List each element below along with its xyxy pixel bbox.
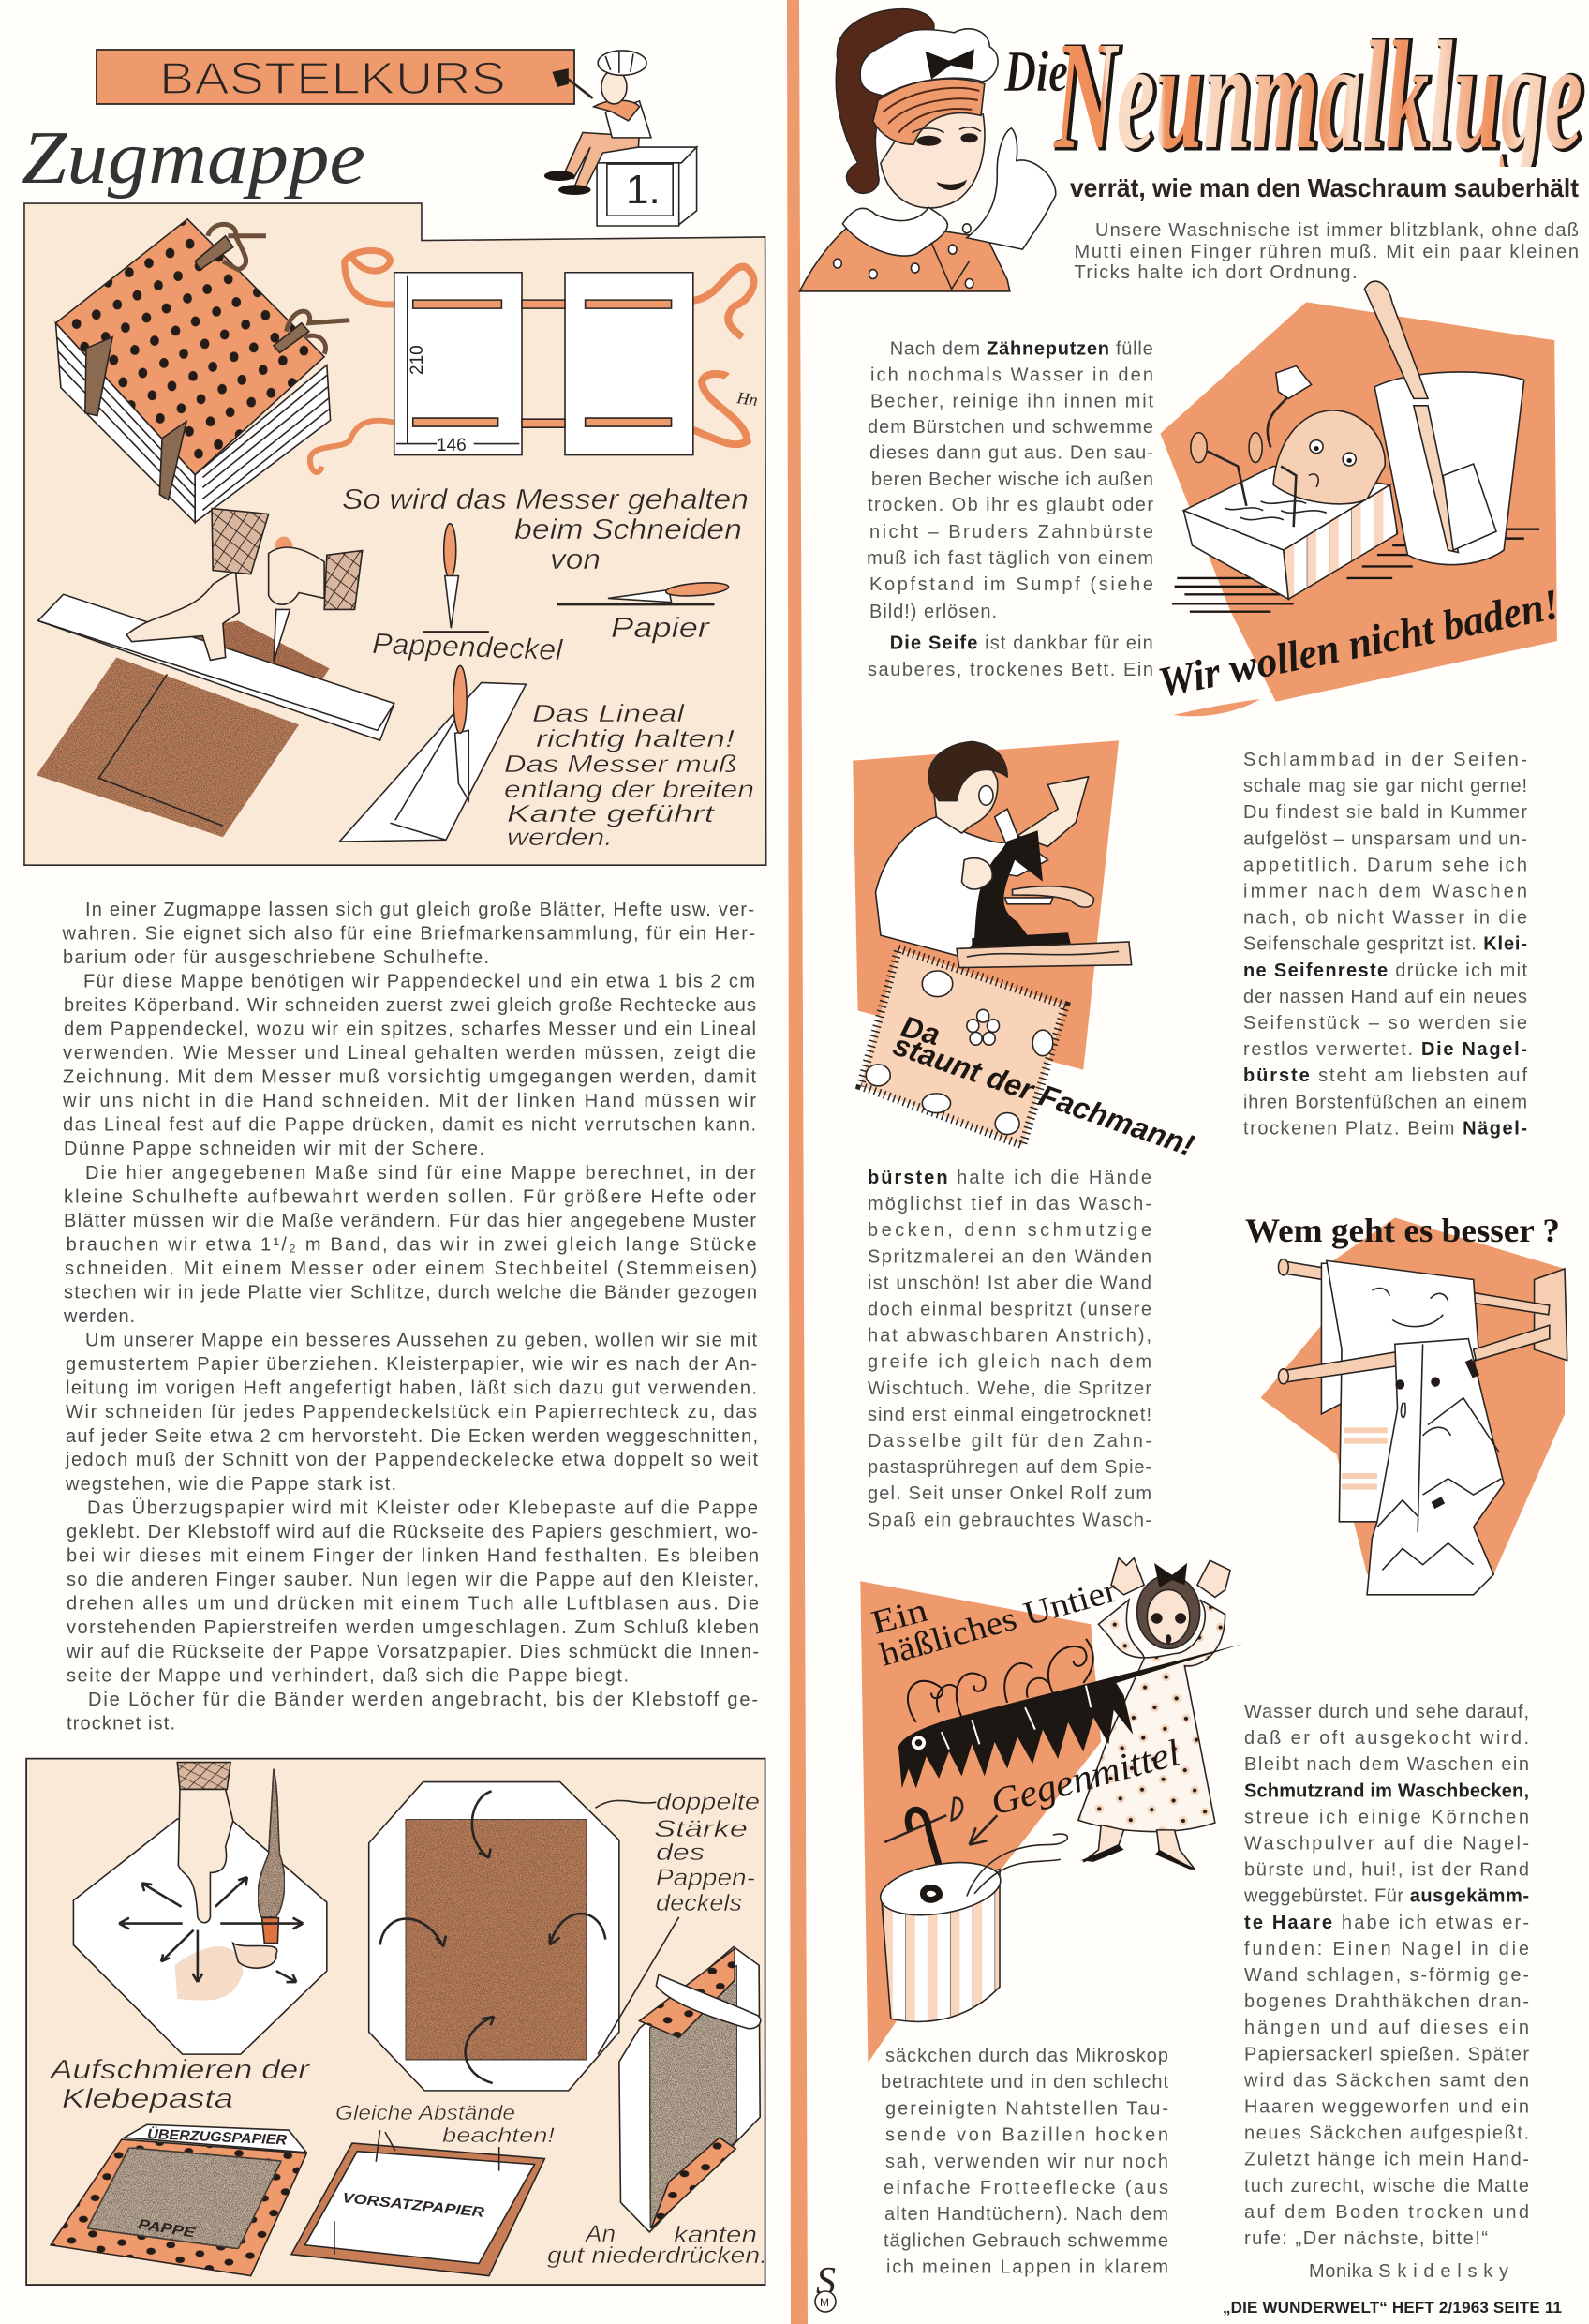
- caption: ruler tip: werden.: [507, 823, 613, 851]
- text block: column 1 middle: Spaß ein gebrauchtes Wasch-: [868, 1510, 1151, 1530]
- text block: column 2 bottom: [1243, 1702, 1529, 2249]
- illustration: pressing the edges: [595, 1800, 761, 2232]
- text block: column 1 bottom: sende von Bazillen hocken: [885, 2125, 1168, 2146]
- text block: column 1 bottom: täglichen Gebrauch schwemme: [884, 2230, 1168, 2251]
- text block: column 2 top: Seifenstück – so werden sie: [1243, 1013, 1527, 1034]
- text block: column 2 top: appetitlich. Darum sehe ich: [1243, 855, 1527, 875]
- text block: column 1 middle: pastasprühregen auf dem Spie-: [868, 1457, 1151, 1478]
- text block: Zugmappe article: trocknet ist.: [67, 1713, 175, 1734]
- text block: column 2 bottom: daß er oft ausgekocht wird.: [1244, 1728, 1529, 1749]
- text block: column 1 top: sauberes, trockenes Bett. Ein: [868, 660, 1153, 680]
- text block: Zugmappe article: Für diese Mappe benötigen wir Pappendeckel und ein etwa 1 bis 2 cm: [83, 971, 755, 991]
- caption: equal distances: [335, 2101, 555, 2147]
- text block: column 1 top: Becher, reinige ihn innen mit: [870, 391, 1153, 411]
- text block: column 1 middle: Wischtuch. Wehe, die Spritzer: [868, 1378, 1151, 1399]
- caption: ruler tip: Kante geführt: [507, 799, 716, 827]
- text block: column 1 bottom: einfache Frotteeflecke (aus: [884, 2178, 1168, 2198]
- text block: column 2 top: Schlammbad in der Seifen-: [1243, 750, 1527, 770]
- intro text: [1074, 220, 1579, 283]
- text block: column 2 top: [1243, 750, 1527, 1139]
- text block: Zugmappe article: Blätter müssen wir die Maße verändern. Für das hier angegebene Muster: [64, 1211, 756, 1231]
- text block: column 2 bottom: Schmutzrand im Waschbecken,: [1244, 1780, 1529, 1801]
- illustration: knife positions: [423, 524, 729, 632]
- caption: knife grip: Pappendeckel: [372, 627, 564, 666]
- banner title: BASTELKURS: [159, 54, 506, 104]
- text block: column 2 bottom: Papiersackerl spießen. Später: [1244, 2044, 1529, 2064]
- caption: double thickness: des: [656, 1840, 705, 1866]
- text block: Zugmappe article: werden.: [63, 1306, 135, 1327]
- text block: column 2 bottom: tuch zurecht, wische die Matte: [1244, 2176, 1529, 2197]
- text block: Zugmappe article: Dünne Pappe schneiden wir mit der Schere.: [64, 1139, 484, 1159]
- text block: column 2 bottom: Haaren weggeworfen und ein: [1244, 2097, 1529, 2118]
- caption: press edges: gut niederdrücken.: [547, 2242, 767, 2269]
- labels on paper: ÜBERZUGSPAPIER: [147, 2126, 288, 2149]
- illustration: cover paper on cardboard: [51, 2124, 306, 2276]
- text block: column 1 top: dieses dann gut aus. Den sau-: [869, 443, 1153, 464]
- text block: column 2 top: Seifenschale gespritzt ist. Klei-: [1243, 934, 1527, 955]
- panel: Zugmappe instructions: [24, 203, 766, 865]
- text block: Zugmappe article: breites Köperband. Wir schneiden zuerst zwei gleich große Rechtecke aus: [64, 995, 756, 1016]
- caption: Ein hässliches Untier: Ein: [868, 1591, 931, 1642]
- icon: boy sitting on numbered box: [544, 51, 697, 226]
- text block: Zugmappe article: Zeichnung. Mit dem Messer muß vorsichtig umgegangen werden, damit: [63, 1067, 756, 1088]
- caption: applying paste: Aufschmieren der: [49, 2055, 311, 2085]
- text block: column 2 bottom: auf dem Boden trocken und: [1244, 2202, 1529, 2223]
- text block: column 2 top: der nassen Hand auf ein neues: [1243, 987, 1527, 1007]
- caption: double thickness: [654, 1789, 760, 1916]
- text block: Zugmappe article: verwenden. Wie Messer und Lineal gehalten werden müssen, zeigt die: [63, 1043, 756, 1064]
- text block: column 1 middle: bürsten halte ich die Hände: [868, 1168, 1151, 1188]
- text block: column 2 top: ne Seifenreste drücke ich mit: [1243, 961, 1527, 981]
- text block: Zugmappe article: drehen alles um und drücken mit einem Tuch alle Luftblasen aus. Die: [67, 1594, 759, 1615]
- text block: Zugmappe article: barium oder für ausgeschriebene Schulhefte.: [63, 947, 489, 968]
- text block: column 2 top: aufgelöst – unsparsam und un-: [1243, 828, 1527, 849]
- mark: initials Hn: Hn: [735, 388, 759, 410]
- text block: column 1 bottom: betrachtete und in den schlecht: [881, 2072, 1168, 2093]
- labels on paper: PAPPE: [137, 2216, 197, 2242]
- illustration: endpaper frame: [291, 2130, 544, 2276]
- text block: column 2 bottom: Wand schlagen, s-förmig ge-: [1244, 1965, 1529, 1986]
- text block: column 1 middle: ist unschön! Ist aber die Wand: [868, 1273, 1151, 1293]
- text block: column 1 top: muß ich fast täglich von einem: [867, 548, 1153, 569]
- text block: Zugmappe article: In einer Zugmappe lassen sich gut gleich große Blätter, Hefte usw. ver-: [85, 900, 754, 920]
- illustration: soap in dish and glass: [1160, 281, 1557, 702]
- intro text: Unsere Waschnische ist immer blitzblank, ohne daß: [1095, 220, 1579, 241]
- text block: Zugmappe article: vorstehenden Papierstreifen werden umgeschlagen. Zum Schluß kleben: [67, 1617, 759, 1638]
- text block: column 1 top: Die Seife ist dankbar für ein: [890, 633, 1153, 654]
- caption: knife grip: beim Schneiden: [514, 513, 742, 545]
- box number: 1.: [626, 167, 661, 213]
- text block: column 1 top: Kopfstand im Sumpf (siehe: [869, 574, 1153, 595]
- text block: Zugmappe article: stechen wir in jede Platte vier Schlitze, durch welche die Bänder gezogen: [64, 1282, 757, 1303]
- text block: column 2 bottom: wird das Säckchen samt den: [1243, 2070, 1529, 2091]
- caption: Da staunt der Fachmann: Da: [898, 1009, 943, 1051]
- text block: column 1 top: beren Becher wische ich außen: [871, 469, 1153, 490]
- intro text: Tricks halte ich dort Ordnung.: [1074, 262, 1357, 283]
- text block: column 1 middle: doch einmal bespritzt (unsere: [868, 1299, 1151, 1319]
- text block: column 1 bottom: gereinigten Nahtstellen Tau-: [885, 2098, 1168, 2119]
- text block: Zugmappe article: bei wir dieses mit einem Finger der linken Hand festhalten. Es bleiben: [67, 1546, 759, 1567]
- caption: ruler tip: entlang der breiten: [504, 775, 754, 803]
- text block: column 2 bottom: hängen und auf dieses ein: [1244, 2018, 1529, 2038]
- caption: press edges: kanten: [674, 2222, 757, 2248]
- text block: Zugmappe article: leitung im vorigen Heft angefertigt haben, läßt sich dazu gut verwenden.: [66, 1378, 757, 1399]
- text block: column 2 top: restlos verwertet. Die Nagel-: [1243, 1039, 1527, 1060]
- caption: equal distances: Gleiche Abstände: [335, 2101, 515, 2124]
- text block: column 2 bottom: rufe: „Der nächste, bitte!“: [1244, 2228, 1488, 2249]
- caption: double thickness: Pappen-: [656, 1865, 755, 1891]
- text block: column 2 top: nach, ob nicht Wasser in die: [1243, 908, 1527, 929]
- text block: column 1 top: ich nochmals Wasser in den: [870, 365, 1153, 386]
- text block: column 1 top: nicht – Bruders Zahnbürste: [869, 522, 1153, 543]
- title: Die Neunmalkluge: Die: [1003, 40, 1068, 104]
- text block: Zugmappe article: wir uns nicht in die Hand schneiden. Mit der linken Hand müssen wir: [62, 1091, 756, 1111]
- text block: Zugmappe article: [62, 900, 759, 1734]
- text block: Zugmappe article: dem Pappendeckel, wozu wir ein spitzes, scharfes Messer und ein Lineal: [64, 1020, 756, 1040]
- text block: column 1 bottom: ich meinen Lappen in klarem: [886, 2257, 1168, 2278]
- text block: column 2 top: bürste steht am liebsten auf: [1243, 1065, 1527, 1086]
- caption: ruler tip: Das Lineal: [532, 699, 686, 727]
- text block: column 1 middle: möglichst tief in das Wasch-: [868, 1194, 1151, 1214]
- text block: column 2 bottom: weggebürstet. Für ausgekämm-: [1243, 1886, 1529, 1907]
- text block: Zugmappe article: Das Überzugspapier wird mit Kleister oder Klebepaste auf die Pappe: [87, 1497, 758, 1518]
- icon: monogram SM: M: [820, 2296, 829, 2309]
- text block: column 1 middle: gel. Seit unser Onkel Rolf zum: [868, 1483, 1151, 1504]
- text block: column 1 bottom: sah, verwenden wir nur noch: [885, 2152, 1168, 2172]
- text block: Zugmappe article: wahren. Sie eignet sich also für eine Briefmarkensammlung, für ein Her-: [62, 923, 755, 944]
- caption: knife grip: [342, 483, 749, 666]
- text block: column 2 bottom: Wasser durch und sehe darauf,: [1244, 1702, 1529, 1722]
- text block: Zugmappe article: wir auf die Rückseite der Pappe Vorsatzpapier. Dies schmückt die Innen-: [66, 1642, 759, 1662]
- text block: column 2 bottom: streue ich einige Körnchen: [1244, 1807, 1529, 1827]
- illustration: ruler and knife: [339, 665, 526, 842]
- text block: column 1 middle: [868, 1168, 1151, 1530]
- illustration: hand cutting cardboard: [37, 509, 394, 837]
- text block: column 1 bottom: alten Handtüchern). Nach dem: [884, 2204, 1168, 2225]
- text block: column 1 bottom: [881, 2046, 1168, 2278]
- text block: column 1 middle: sind erst einmal eingetrocknet!: [868, 1405, 1151, 1425]
- caption: double thickness: Stärke: [654, 1816, 748, 1842]
- text block: column 1 top: [867, 339, 1153, 680]
- text block: column 2 bottom: funden: Einen Nagel in die: [1244, 1939, 1529, 1959]
- title: Die Neunmalkluge: [1004, 38, 1585, 167]
- labels on paper: [137, 2126, 485, 2242]
- caption: knife grip: Papier: [611, 611, 711, 644]
- labels on paper: VORSATZPAPIER: [342, 2190, 485, 2221]
- panel: gluing instructions: [26, 1759, 767, 2285]
- text block: Zugmappe article: Wir schneiden für jedes Pappendeckelstück ein Papierrechteck zu, das: [66, 1402, 757, 1423]
- illustration: comb monster, girl and pot: [860, 1558, 1243, 2063]
- illustration: towels on rack: [1261, 1217, 1567, 1595]
- illustration: scientist with microscope: [853, 740, 1132, 1070]
- text block: column 2 bottom: bürste und, hui!, ist der Rand: [1244, 1860, 1529, 1881]
- text block: column 2 top: trockenen Platz. Beim Nägel-: [1243, 1118, 1527, 1139]
- text block: column 1 bottom: säckchen durch das Mikroskop: [885, 2046, 1168, 2066]
- text block: column 2 bottom: bogenes Drahthäkchen dran-: [1244, 1991, 1529, 2012]
- caption: ruler tip: [504, 699, 754, 851]
- text block: column 2 bottom: te Haare habe ich etwas er-: [1244, 1913, 1529, 1933]
- author signature: Monika S k i d e l s k y: [1309, 2261, 1508, 2282]
- text block: Zugmappe article: so die anderen Finger sauber. Nun legen wir die Pappe auf den Kleister,: [67, 1570, 759, 1590]
- caption: knife grip: von: [550, 543, 601, 575]
- text block: column 1 middle: Spritzmalerei an den Wänden: [868, 1246, 1151, 1267]
- caption: ruler tip: Das Messer muß: [504, 750, 737, 778]
- text block: Zugmappe article: Die Löcher für die Bänder werden angebracht, bis der Klebstoff ge-: [88, 1690, 758, 1710]
- caption: Da staunt der Fachmann: staunt der Fachmann!: [889, 1028, 1198, 1162]
- caption: press edges: [547, 2221, 767, 2269]
- banner: Bastelkurs: [97, 50, 574, 104]
- text block: column 2 bottom: Zuletzt hänge ich mein Hand-: [1244, 2150, 1529, 2170]
- heading: Zugmappe: Zugmappe: [22, 117, 365, 200]
- text block: column 2 top: immer nach dem Waschen: [1243, 881, 1527, 901]
- illustration: girl with raised finger: [799, 9, 1056, 291]
- text block: Zugmappe article: brauchen wir etwa 1¹/₂ m Band, das wir in zwei gleich lange Stücke: [67, 1234, 757, 1255]
- caption: Wem geht es besser: Wem geht es besser ?: [1245, 1212, 1560, 1249]
- caption: equal distances: beachten!: [442, 2123, 555, 2147]
- text block: column 1 middle: becken, denn schmutzige: [868, 1220, 1151, 1241]
- text block: Zugmappe article: geklebt. Der Klebstoff wird auf die Rückseite des Papiers geschmiert, wo-: [67, 1522, 758, 1542]
- text block: Zugmappe article: gemustertem Papier überziehen. Kleisterpapier, wie wir es nach der An-: [66, 1354, 757, 1375]
- text block: column 1 middle: hat abwaschbaren Anstrich),: [868, 1326, 1151, 1347]
- text block: column 2 top: Du findest sie bald in Kummer: [1243, 802, 1527, 823]
- illustration: finished folder: [55, 219, 349, 523]
- caption: double thickness: doppelte: [656, 1789, 760, 1815]
- text block: column 2 bottom: Waschpulver auf die Nagel-: [1244, 1833, 1529, 1854]
- illustration: fringed cloth: [860, 948, 1065, 1145]
- text block: column 1 middle: greife ich gleich nach dem: [868, 1352, 1151, 1373]
- illustration: pasteboards with ribbons: [310, 251, 753, 472]
- text block: Zugmappe article: das Lineal fest auf die Pappe drücken, damit es nicht verrutschen kann.: [63, 1115, 756, 1136]
- illustration: gluing with finger and brush: [73, 1763, 327, 2054]
- dimension: 210: 210: [408, 345, 427, 375]
- footer: issue and page: „DIE WUNDERWELT“ HEFT 2/1963 SEITE 11: [1223, 2299, 1562, 2317]
- dimension: 146: 146: [437, 436, 467, 455]
- illustration: cardboard on glued paper: [369, 1782, 619, 2091]
- text block: Zugmappe article: Die hier angegebenen Maße sind für eine Mappe berechnet, in der: [85, 1163, 756, 1184]
- text block: column 2 bottom: neues Säckchen aufgespießt.: [1244, 2123, 1529, 2144]
- caption: applying paste: [49, 2055, 311, 2114]
- text block: column 1 top: Bild!) erlösen.: [869, 602, 997, 622]
- text block: Zugmappe article: auf jeder Seite etwa 2 cm hervorsteht. Die Ecken werden weggeschnitten,: [66, 1426, 758, 1447]
- text block: Zugmappe article: Um unserer Mappe ein besseres Aussehen zu geben, wollen wir sie mit: [85, 1331, 757, 1351]
- text block: column 1 top: trocken. Ob ihr es glaubt oder: [868, 495, 1153, 515]
- caption: double thickness: deckels: [656, 1890, 742, 1916]
- text block: column 1 middle: Dasselbe gilt für den Zahn-: [868, 1431, 1151, 1452]
- text block: Zugmappe article: seite der Mappe und verhindert, daß sich die Pappe biegt.: [67, 1665, 629, 1686]
- text block: column 2 top: schale mag sie gar nicht gerne!: [1243, 776, 1527, 797]
- icon: monogram SM: S: [816, 2260, 836, 2303]
- caption: knife grip: So wird das Messer gehalten: [342, 483, 749, 515]
- text block: column 1 top: Nach dem Zähneputzen fülle: [890, 339, 1153, 360]
- orange centre stripe: [787, 0, 808, 2324]
- caption: Wir wollen nicht baden: Wir wollen nicht baden!: [1154, 580, 1564, 707]
- caption: press edges: An: [584, 2221, 616, 2247]
- text block: Zugmappe article: jedoch muß der Schnitt von der Pappendeckelecke etwa doppelt so weit: [65, 1450, 758, 1470]
- text block: Zugmappe article: kleine Schulhefte aufbewahrt werden sollen. Für größere Hefte oder: [64, 1186, 756, 1207]
- caption: applying paste: Klebepasta: [62, 2084, 233, 2114]
- text block: column 2 bottom: Bleibt nach dem Waschen ein: [1244, 1754, 1529, 1775]
- caption: Gegenmittel: Gegenmittel: [986, 1731, 1184, 1824]
- text block: Zugmappe article: schneiden. Mit einem Messer oder einem Stechbeitel (Stemmeisen): [65, 1259, 757, 1279]
- underline: Wir: [1173, 699, 1260, 716]
- caption: ruler tip: richtig halten!: [536, 724, 735, 752]
- intro text: Mutti einen Finger rühren muß. Mit ein paar kleinen: [1074, 242, 1579, 262]
- text block: column 1 top: dem Bürstchen und schwemme: [868, 417, 1153, 438]
- text block: Zugmappe article: wegstehen, wie die Pappe stark ist.: [65, 1474, 396, 1495]
- caption: Ein hässliches Untier: häßliches Untier: [875, 1572, 1121, 1674]
- text block: column 2 top: ihren Borstenfüßchen an einem: [1243, 1092, 1527, 1112]
